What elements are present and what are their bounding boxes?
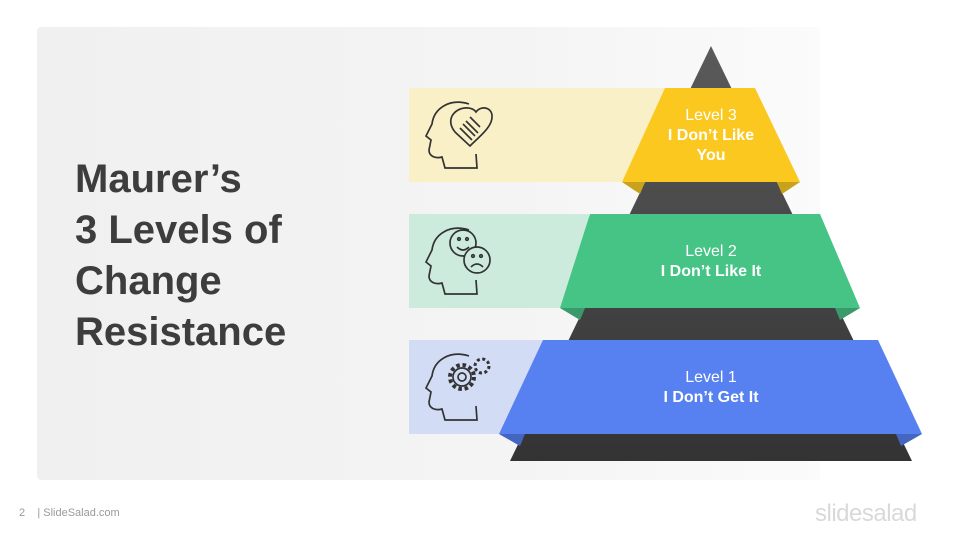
icon: head with heart [426, 102, 492, 168]
level 1 band: I Don’t Get It [663, 389, 759, 406]
icon: head with gears [426, 354, 489, 420]
level 3 band: Level 3 [685, 107, 737, 124]
level 3 band [622, 88, 800, 194]
level 3 band: You [696, 147, 726, 164]
background panel [37, 27, 820, 480]
footer: 2 | SlideSalad.com [19, 507, 120, 519]
title: 3 Levels of [75, 208, 282, 252]
title: Maurer’s [75, 157, 242, 201]
level 2 band: Level 2 [685, 243, 737, 260]
title: Resistance [75, 310, 286, 354]
level 1 band: Level 1 [685, 369, 737, 386]
logo: slidesalad [815, 500, 917, 527]
icon: head with faces [426, 228, 490, 294]
light background strips [409, 88, 669, 434]
level 1 band [499, 340, 922, 446]
dark pyramid [510, 46, 912, 461]
title [75, 157, 286, 354]
title: Change [75, 259, 222, 303]
level 2 band [560, 214, 860, 320]
level 3 band: I Don’t Like [668, 127, 754, 144]
level 2 band: I Don’t Like It [661, 263, 762, 280]
